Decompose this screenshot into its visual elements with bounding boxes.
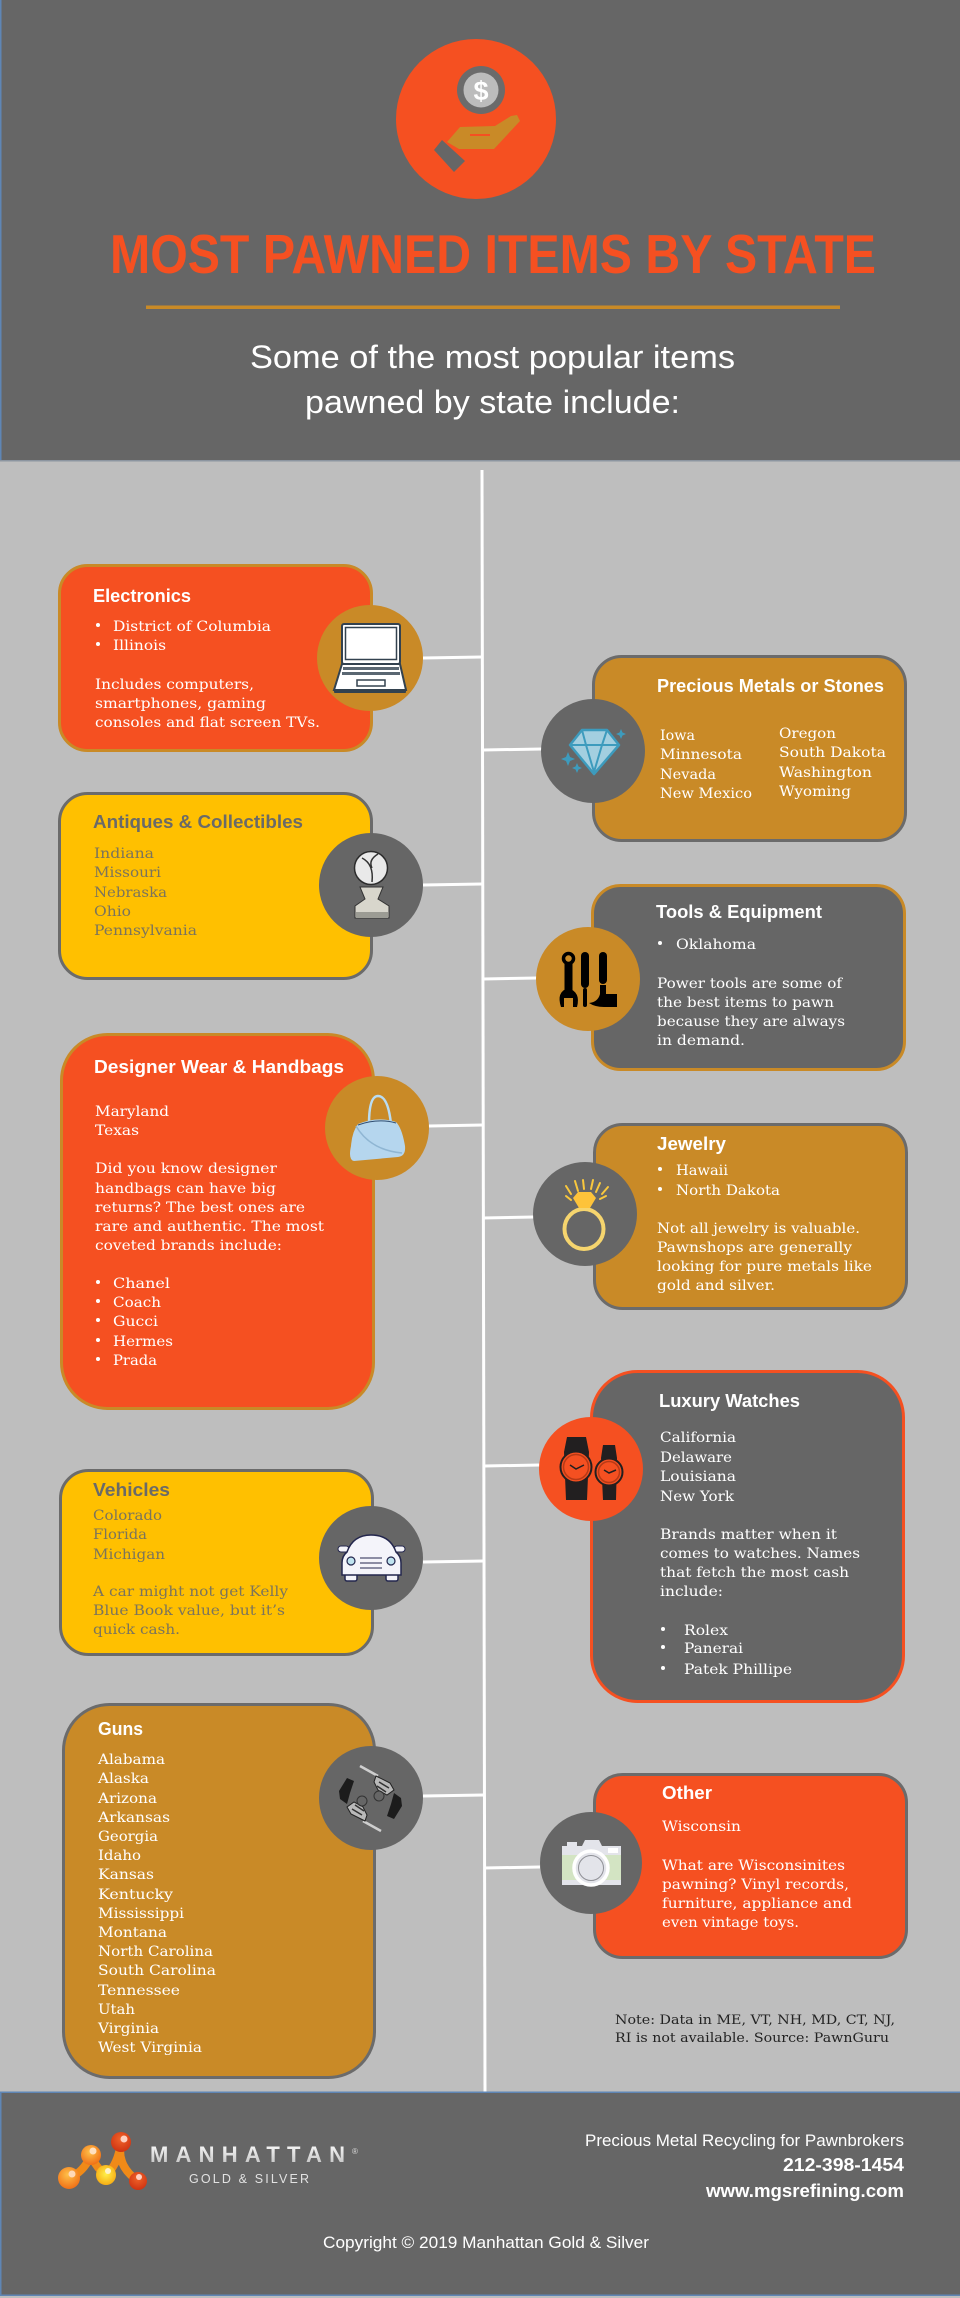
panel: jewelry [533, 1124, 906, 1308]
contact details: 212-398-1454 [783, 2155, 904, 2175]
text: luxury watches body: Panerai [684, 1641, 744, 1657]
text: other body: Wisconsin [662, 1819, 741, 1835]
text: luxury watches body: comes to watches. Names [660, 1546, 860, 1562]
text: designer body: coveted brands include: [95, 1238, 282, 1254]
text: jewelry body [657, 1163, 872, 1294]
text: jewelry body: Hawaii [676, 1163, 729, 1179]
text: vehicles body: Florida [93, 1527, 147, 1543]
text: designer body: Prada [113, 1353, 157, 1369]
text: jewelry body: gold and silver. [657, 1278, 775, 1294]
text: antiques states [94, 846, 197, 939]
text: guns states: Arkansas [97, 1810, 170, 1826]
text: guns states: Mississippi [98, 1906, 185, 1922]
contact details: www.mgsrefining.com [705, 2181, 904, 2201]
icon: tools [536, 927, 640, 1031]
logo: Manhattan Gold & Silver [58, 2132, 358, 2190]
heading: tools: Tools & Equipment [656, 902, 822, 922]
text: tools body: in demand. [657, 1033, 745, 1049]
text: luxury watches body [660, 1430, 860, 1678]
heading: luxury watches: Luxury Watches [659, 1391, 800, 1411]
text: luxury watches body: Louisiana [660, 1469, 736, 1485]
panel: luxury watches [539, 1372, 904, 1702]
logo: Manhattan Gold & Silver: MANHATTAN [150, 2142, 345, 2167]
heading: jewelry: Jewelry [657, 1134, 726, 1154]
heading: other: Other [662, 1783, 712, 1803]
text: other body: furniture, appliance and [662, 1896, 852, 1912]
text: guns states: Georgia [98, 1829, 158, 1845]
text: tools body: Power tools are some of [657, 976, 843, 992]
icon: hand holding coin: $ [473, 76, 489, 106]
text: designer body: Gucci [113, 1314, 159, 1330]
text: designer body: Maryland [95, 1104, 169, 1120]
text: guns states: Utah [98, 2002, 135, 2018]
logo: Manhattan Gold & Silver: ® [352, 2147, 358, 2156]
text: designer body: Texas [95, 1123, 139, 1139]
text: tools body: Oklahoma [676, 937, 756, 953]
subtitle: Some of the most popular items [250, 339, 735, 375]
text: tools body: the best items to pawn [657, 995, 834, 1011]
text: electronics body: Illinois [113, 638, 166, 654]
timeline spine and connectors [423, 470, 542, 2092]
footer band [0, 2092, 960, 2296]
text: guns states: West Virginia [98, 2040, 202, 2056]
text: vehicles body: quick cash. [93, 1622, 180, 1638]
text: luxury watches body: Patek Phillipe [684, 1662, 792, 1678]
text: luxury watches body: California [660, 1430, 736, 1446]
text: designer body: handbags can have big [95, 1181, 276, 1197]
heading: designer wear: Designer Wear & Handbags [94, 1057, 344, 1077]
text: precious metals states [660, 726, 886, 802]
panel: tools and equipment [536, 886, 904, 1070]
text: electronics body [95, 619, 320, 731]
text: designer body: returns? The best ones are [95, 1200, 305, 1216]
text: guns states: North Carolina [98, 1944, 213, 1960]
panel: precious metals or stones [541, 656, 906, 840]
icon: crossed revolvers [319, 1746, 423, 1850]
icon: watches [539, 1417, 643, 1521]
text: other body: even vintage toys. [662, 1915, 799, 1931]
icon: handbag [325, 1076, 429, 1180]
icon: hand holding coin [396, 39, 556, 199]
text: guns states: Kentucky [98, 1887, 173, 1903]
text: guns states: Alabama [97, 1752, 165, 1768]
text: guns states: Kansas [98, 1867, 154, 1883]
text: jewelry body: Not all jewelry is valuable. [657, 1221, 860, 1237]
panel: guns [64, 1704, 423, 2078]
text: electronics body: Includes computers, [95, 677, 254, 693]
text: precious metals states: Nevada [660, 767, 716, 783]
text: vehicles body: A car might not get Kelly [92, 1584, 288, 1600]
text: jewelry body: North Dakota [676, 1183, 780, 1199]
note: Note: Data in ME, VT, NH, MD, CT, NJ, [615, 2013, 895, 2028]
text: electronics body: consoles and flat screen TVs. [95, 715, 320, 731]
text: designer body: Hermes [113, 1334, 173, 1350]
note [615, 2013, 895, 2046]
text: guns states: Tennessee [98, 1983, 180, 1999]
panel: vehicles [60, 1470, 423, 1654]
text: designer body [95, 1104, 325, 1369]
text: guns states: Montana [98, 1925, 167, 1941]
text: other body: What are Wisconsinites [662, 1858, 845, 1874]
text: tools body [657, 937, 845, 1049]
text: vehicles body: Michigan [93, 1547, 165, 1563]
icon: laptop [317, 605, 423, 711]
icon: car [319, 1506, 423, 1610]
panel: electronics [60, 566, 423, 750]
title: MOST PAWNED ITEMS BY STATE [110, 223, 876, 285]
icon: diamond [541, 699, 645, 803]
text: vehicles body: Colorado [93, 1508, 162, 1524]
icon: diamond ring [533, 1162, 637, 1266]
text: designer body: Coach [113, 1295, 161, 1311]
text: vehicles body: Blue Book value, but it’s [93, 1603, 285, 1619]
text: electronics body: smartphones, gaming [95, 696, 266, 712]
heading: electronics: Electronics [93, 586, 191, 606]
panel: antiques and collectibles [60, 794, 423, 978]
text: luxury watches body: Brands matter when it [660, 1527, 838, 1543]
icon: signed baseball trophy [319, 833, 423, 937]
icon: camera [540, 1812, 642, 1914]
text: precious metals states: South Dakota [779, 745, 886, 761]
text: antiques states: Pennsylvania [94, 923, 197, 939]
text: guns states [97, 1752, 216, 2056]
text: luxury watches body: Rolex [684, 1623, 728, 1639]
note: RI is not available. Source: PawnGuru [615, 2031, 889, 2046]
text: guns states: Alaska [97, 1771, 149, 1787]
heading: precious metals: Precious Metals or Stones [657, 676, 884, 696]
subtitle [250, 339, 735, 420]
text: guns states: Virginia [97, 2021, 159, 2037]
text: jewelry body: Pawnshops are generally [657, 1240, 852, 1256]
text: other body: pawning? Vinyl records, [662, 1877, 849, 1893]
header band [0, 0, 960, 462]
text: antiques states: Ohio [94, 904, 131, 920]
text: precious metals states: Oregon [779, 726, 836, 742]
text: precious metals states: Iowa [660, 728, 695, 744]
contact details: Precious Metal Recycling for Pawnbrokers [585, 2131, 904, 2150]
subtitle: pawned by state include: [305, 384, 680, 420]
text: luxury watches body: include: [660, 1584, 723, 1600]
text: guns states: Idaho [98, 1848, 141, 1864]
text: guns states: South Carolina [98, 1963, 216, 1979]
text: guns states: Arizona [97, 1791, 157, 1807]
text: designer body: Did you know designer [95, 1161, 278, 1177]
text: designer body: rare and authentic. The most [95, 1219, 325, 1235]
text: antiques states: Nebraska [94, 885, 167, 901]
panel: other [540, 1774, 906, 1958]
copyright: Copyright © 2019 Manhattan Gold & Silver [323, 2233, 649, 2252]
contact details [585, 2131, 904, 2201]
panel: designer wear and handbags [62, 1034, 429, 1408]
text: jewelry body: looking for pure metals like [657, 1259, 872, 1275]
text: other body [662, 1819, 852, 1931]
text: luxury watches body: Delaware [660, 1450, 732, 1466]
text: luxury watches body: that fetch the most cash [660, 1565, 849, 1581]
text: precious metals states: Washington [779, 765, 872, 781]
text: vehicles body [92, 1508, 288, 1638]
text: designer body: Chanel [113, 1276, 170, 1292]
text: antiques states: Missouri [94, 865, 162, 881]
text: luxury watches body: New York [660, 1489, 735, 1505]
text: antiques states: Indiana [94, 846, 154, 862]
text: electronics body: District of Columbia [113, 619, 271, 635]
text: precious metals states: Minnesota [660, 747, 742, 763]
text: precious metals states: Wyoming [779, 784, 851, 800]
logo: Manhattan Gold & Silver: GOLD & SILVER [189, 2172, 309, 2186]
text: precious metals states: New Mexico [660, 786, 752, 802]
text: tools body: because they are always [657, 1014, 845, 1030]
heading: antiques: Antiques & Collectibles [93, 812, 303, 832]
heading: guns: Guns [98, 1719, 143, 1739]
heading: vehicles: Vehicles [93, 1480, 170, 1500]
